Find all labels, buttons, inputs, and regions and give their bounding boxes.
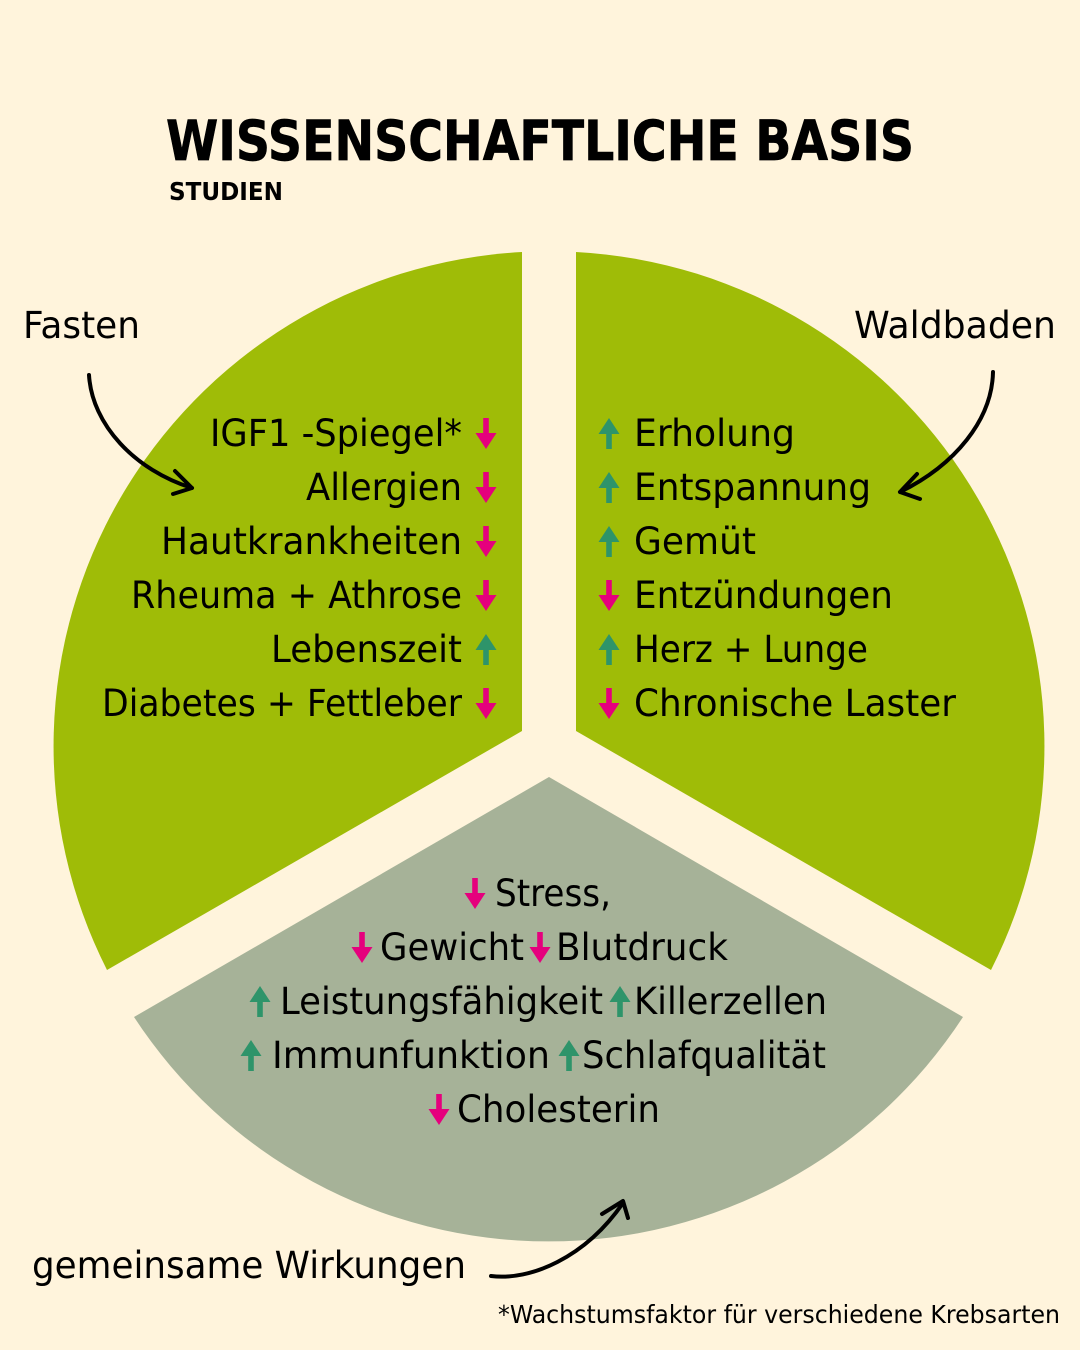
list: Waldbaden effects <box>598 412 957 725</box>
list: gemeinsame Wirkungen: Stress, <box>495 872 611 915</box>
list: gemeinsame Wirkungen: Blutdruck <box>556 926 729 969</box>
subtitle: STUDIEN <box>169 177 283 206</box>
list: Waldbaden effects: Herz + Lunge <box>634 628 868 671</box>
panel: gemeinsame Wirkungen sector <box>134 777 963 1241</box>
list: gemeinsame Wirkungen: Immunfunktion <box>272 1034 550 1077</box>
list: Fasten effects: Rheuma + Athrose <box>131 574 462 617</box>
footnote: *Wachstumsfaktor für verschiedene Krebsarten <box>498 1300 1060 1329</box>
arrow: gemeinsame Wirkungen to sector <box>491 1201 628 1277</box>
list: Fasten effects: Lebenszeit <box>271 628 462 671</box>
arrow: Waldbaden to list <box>900 372 993 499</box>
list: gemeinsame Wirkungen: Gewicht <box>380 926 524 969</box>
list: Fasten effects: IGF1 -Spiegel* <box>210 412 462 455</box>
list: Waldbaden effects: Chronische Laster <box>634 682 957 725</box>
list: Waldbaden effects: Erholung <box>634 412 795 455</box>
list: gemeinsame Wirkungen: Schlafqualität <box>582 1034 826 1077</box>
list: gemeinsame Wirkungen <box>240 872 827 1131</box>
list: gemeinsame Wirkungen: Cholesterin <box>457 1088 660 1131</box>
list: Waldbaden effects: Entspannung <box>634 466 871 509</box>
label: gemeinsame Wirkungen: gemeinsame Wirkungen <box>32 1244 466 1287</box>
list: Fasten effects: Hautkrankheiten <box>161 520 462 563</box>
list: Fasten effects: Allergien <box>306 466 462 509</box>
label: Fasten: Fasten <box>23 304 140 347</box>
label: Waldbaden: Waldbaden <box>854 304 1056 347</box>
list: gemeinsame Wirkungen: Leistungsfähigkeit <box>280 980 603 1023</box>
arrow: Fasten to list <box>89 375 192 494</box>
list: Fasten effects: Diabetes + Fettleber <box>102 682 463 725</box>
title: WISSENSCHAFTLICHE BASIS <box>166 109 914 173</box>
panel: Waldbaden sector <box>576 252 1044 970</box>
list: gemeinsame Wirkungen: Killerzellen <box>634 980 827 1023</box>
panel: Fasten sector <box>54 252 522 970</box>
list: Waldbaden effects: Entzündungen <box>634 574 893 617</box>
list: Fasten effects <box>102 412 496 725</box>
list: Waldbaden effects: Gemüt <box>634 520 756 563</box>
